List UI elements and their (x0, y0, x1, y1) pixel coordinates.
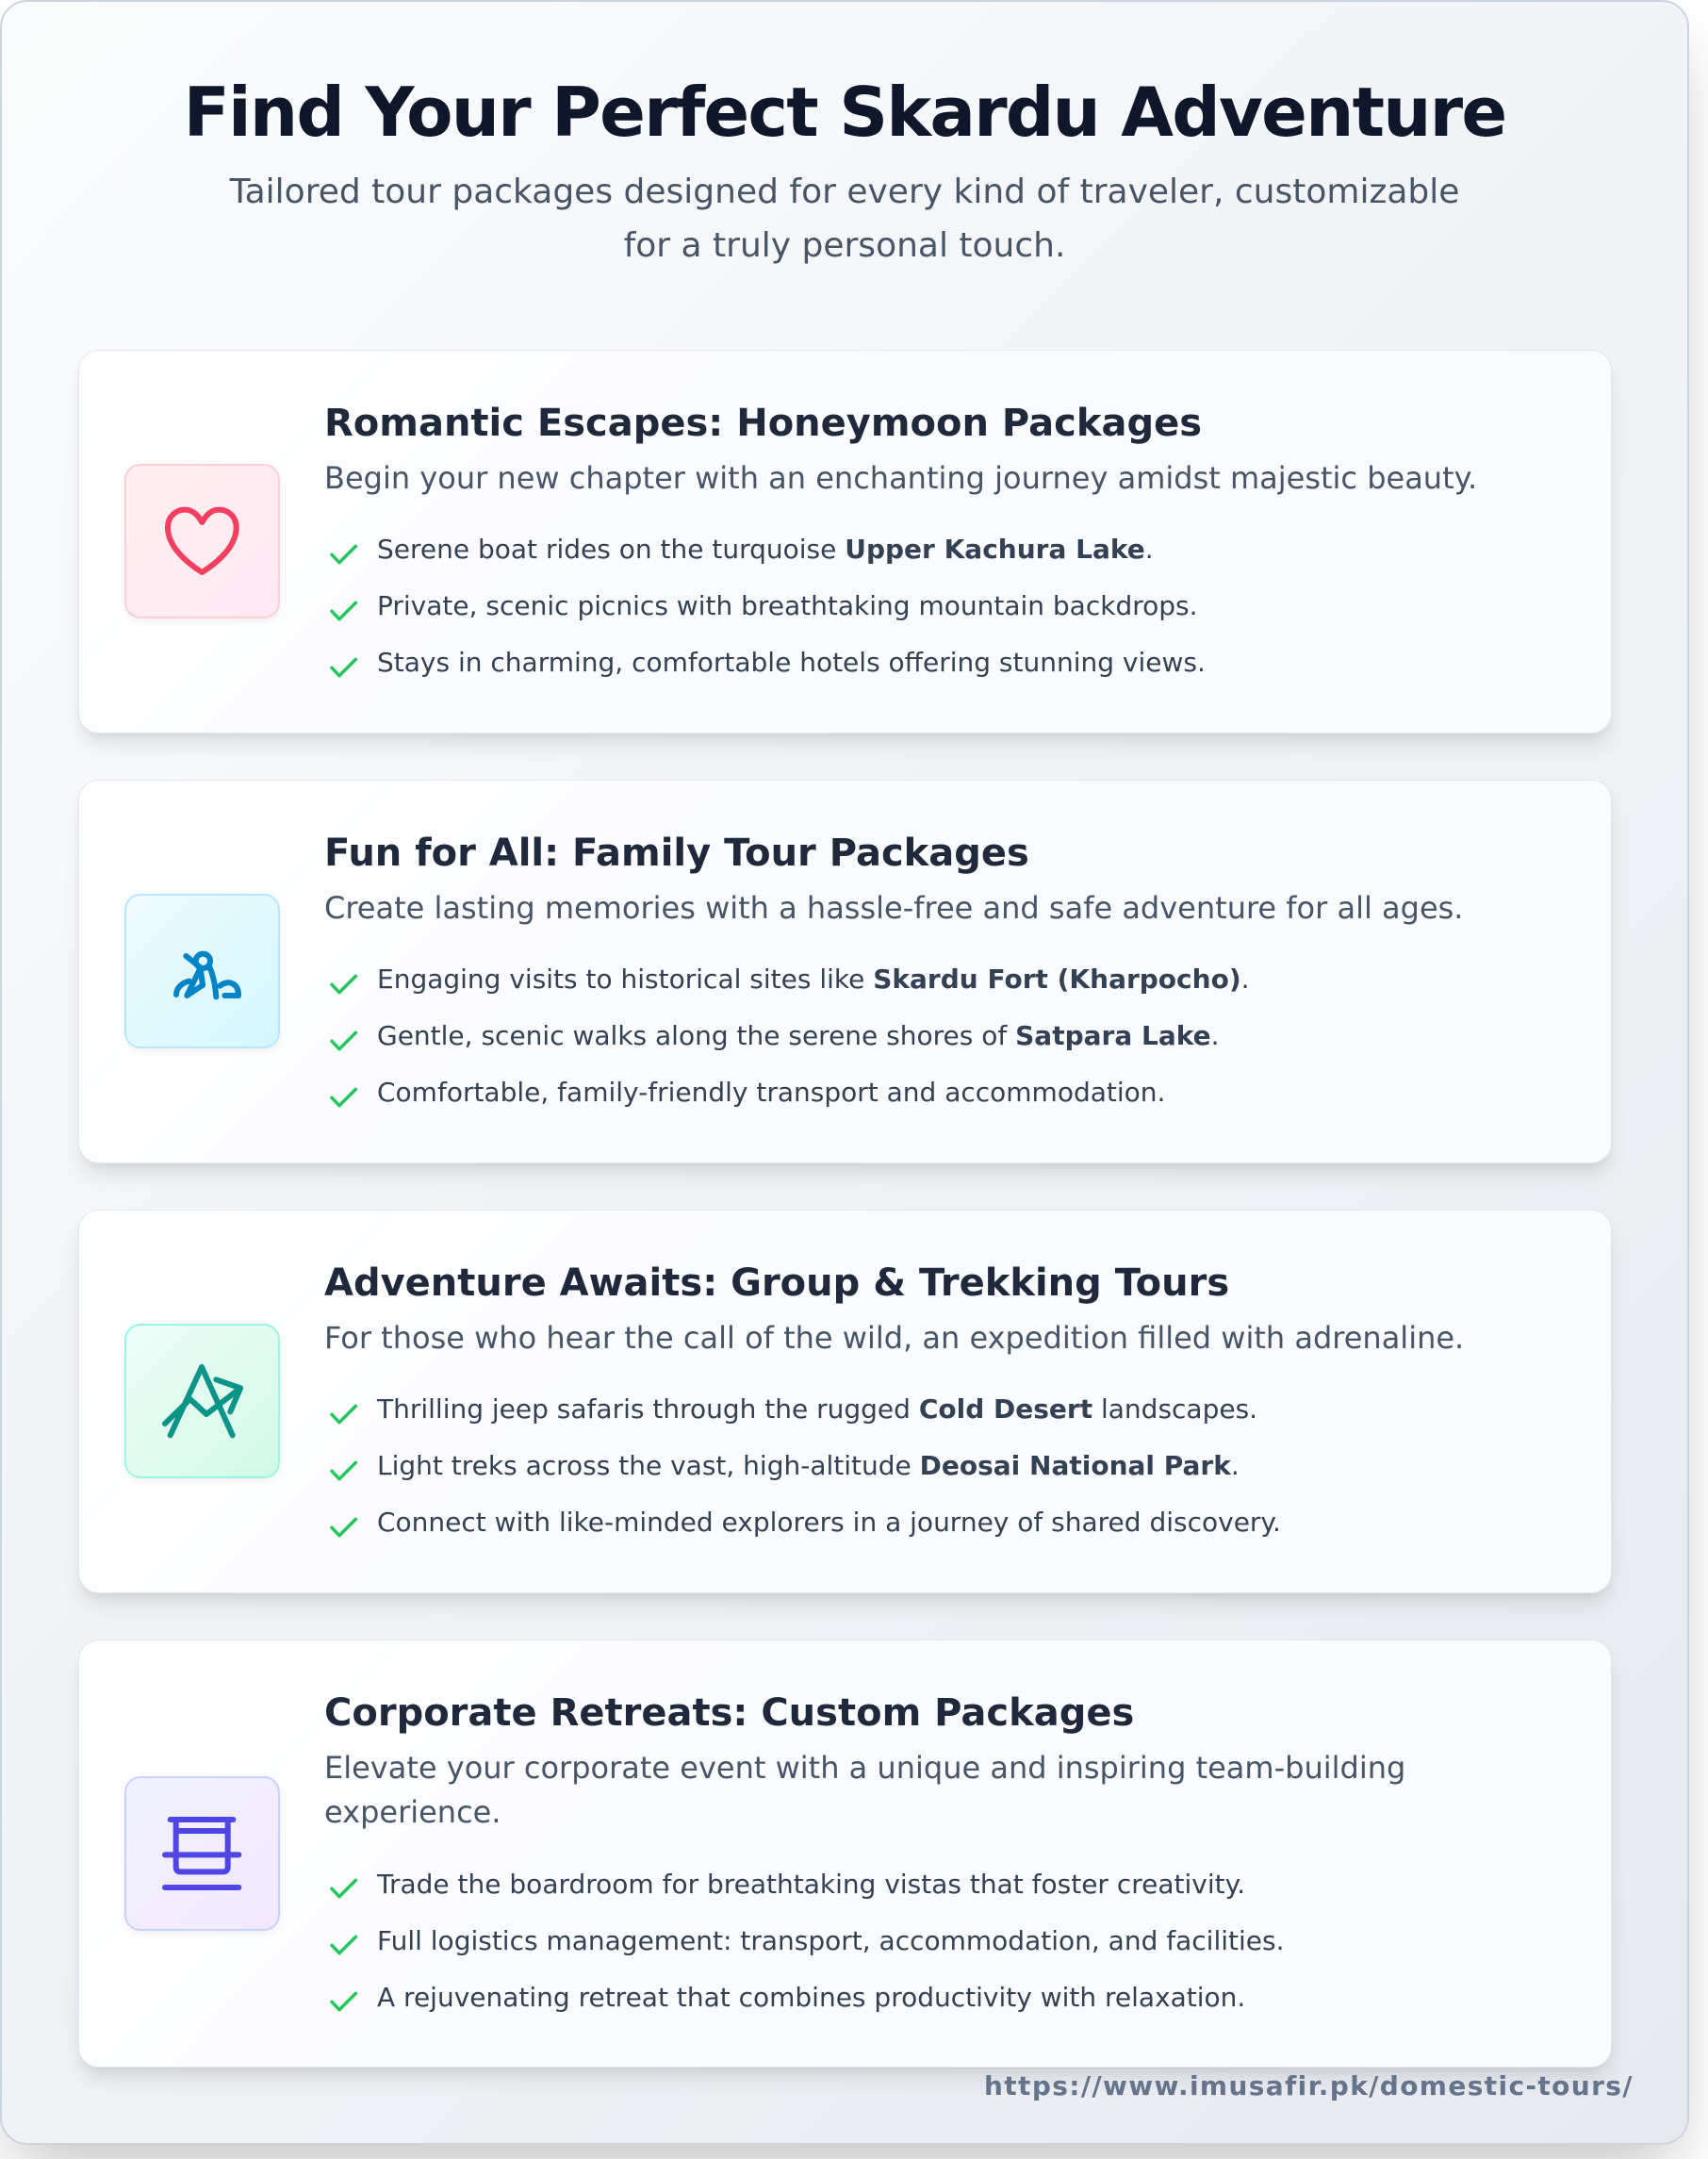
list item: Light treks across the vast, high-altitude Deosai National Park. (377, 1450, 1240, 1481)
list item: Serene boat rides on the turquoise Upper Kachura Lake. (377, 534, 1154, 565)
heading: Corporate Retreats: Custom Packages (324, 1691, 1134, 1735)
list item: Private, scenic picnics with breathtaking mountain backdrops. (377, 590, 1198, 621)
check icon (330, 545, 358, 564)
description: Begin your new chapter with an enchanting journey amidst majestic beauty. (324, 460, 1477, 496)
list item: Full logistics management: transport, accommodation, and facilities. (377, 1925, 1284, 1956)
check icon (330, 1088, 358, 1107)
icon: office building (124, 1776, 280, 1931)
heading: Romantic Escapes: Honeymoon Packages (324, 402, 1202, 445)
check icon (330, 1991, 358, 2012)
list item: Connect with like-minded explorers in a journey of shared discovery. (377, 1507, 1281, 1538)
icon: family (124, 894, 280, 1048)
heading: Adventure Awaits: Group & Trekking Tours (324, 1261, 1229, 1305)
heading: Fun for All: Family Tour Packages (324, 832, 1029, 875)
check icon (330, 1461, 358, 1480)
list item: Thrilling jeep safaris through the rugged Cold Desert landscapes. (377, 1393, 1257, 1425)
list item: Engaging visits to historical sites like Skardu Fort (Kharpocho). (377, 964, 1250, 995)
check icon (330, 1405, 358, 1424)
check icon (330, 1031, 358, 1050)
list item: Gentle, scenic walks along the serene shores of Satpara Lake. (377, 1020, 1219, 1051)
panel: group and trekking tours (78, 1210, 1612, 1593)
description (324, 1750, 1405, 1830)
title: Find Your Perfect Skardu Adventure (184, 73, 1505, 152)
panel: corporate retreats (78, 1640, 1612, 2068)
description: Elevate your corporate event with a unique and inspiring team-building (324, 1750, 1405, 1786)
list item: Trade the boardroom for breathtaking vistas that foster creativity. (377, 1869, 1245, 1900)
check icon (330, 1878, 358, 1899)
list item: A rejuvenating retreat that combines productivity with relaxation. (377, 1982, 1245, 2013)
check icon (330, 658, 358, 677)
icon: mountain with arrow (124, 1324, 280, 1478)
check icon (330, 602, 358, 620)
description: experience. (324, 1794, 501, 1830)
check icon (330, 975, 358, 994)
check icon (330, 1518, 358, 1537)
panel: honeymoon packages (78, 350, 1612, 733)
check icon (330, 1935, 358, 1955)
subtitle: for a truly personal touch. (624, 226, 1065, 265)
description: For those who hear the call of the wild, an expedition filled with adrenaline. (324, 1320, 1464, 1356)
subtitle: Tailored tour packages designed for every kind of traveler, customizable (230, 173, 1459, 211)
list item: Comfortable, family-friendly transport and accommodation. (377, 1077, 1165, 1108)
description: Create lasting memories with a hassle-free and safe adventure for all ages. (324, 890, 1463, 926)
list item: Stays in charming, comfortable hotels offering stunning views. (377, 647, 1206, 678)
footer url: https://www.imusafir.pk/domestic-tours/ (984, 2070, 1634, 2101)
panel: family packages (78, 780, 1612, 1163)
subtitle (230, 173, 1459, 265)
icon: heart (124, 464, 280, 618)
